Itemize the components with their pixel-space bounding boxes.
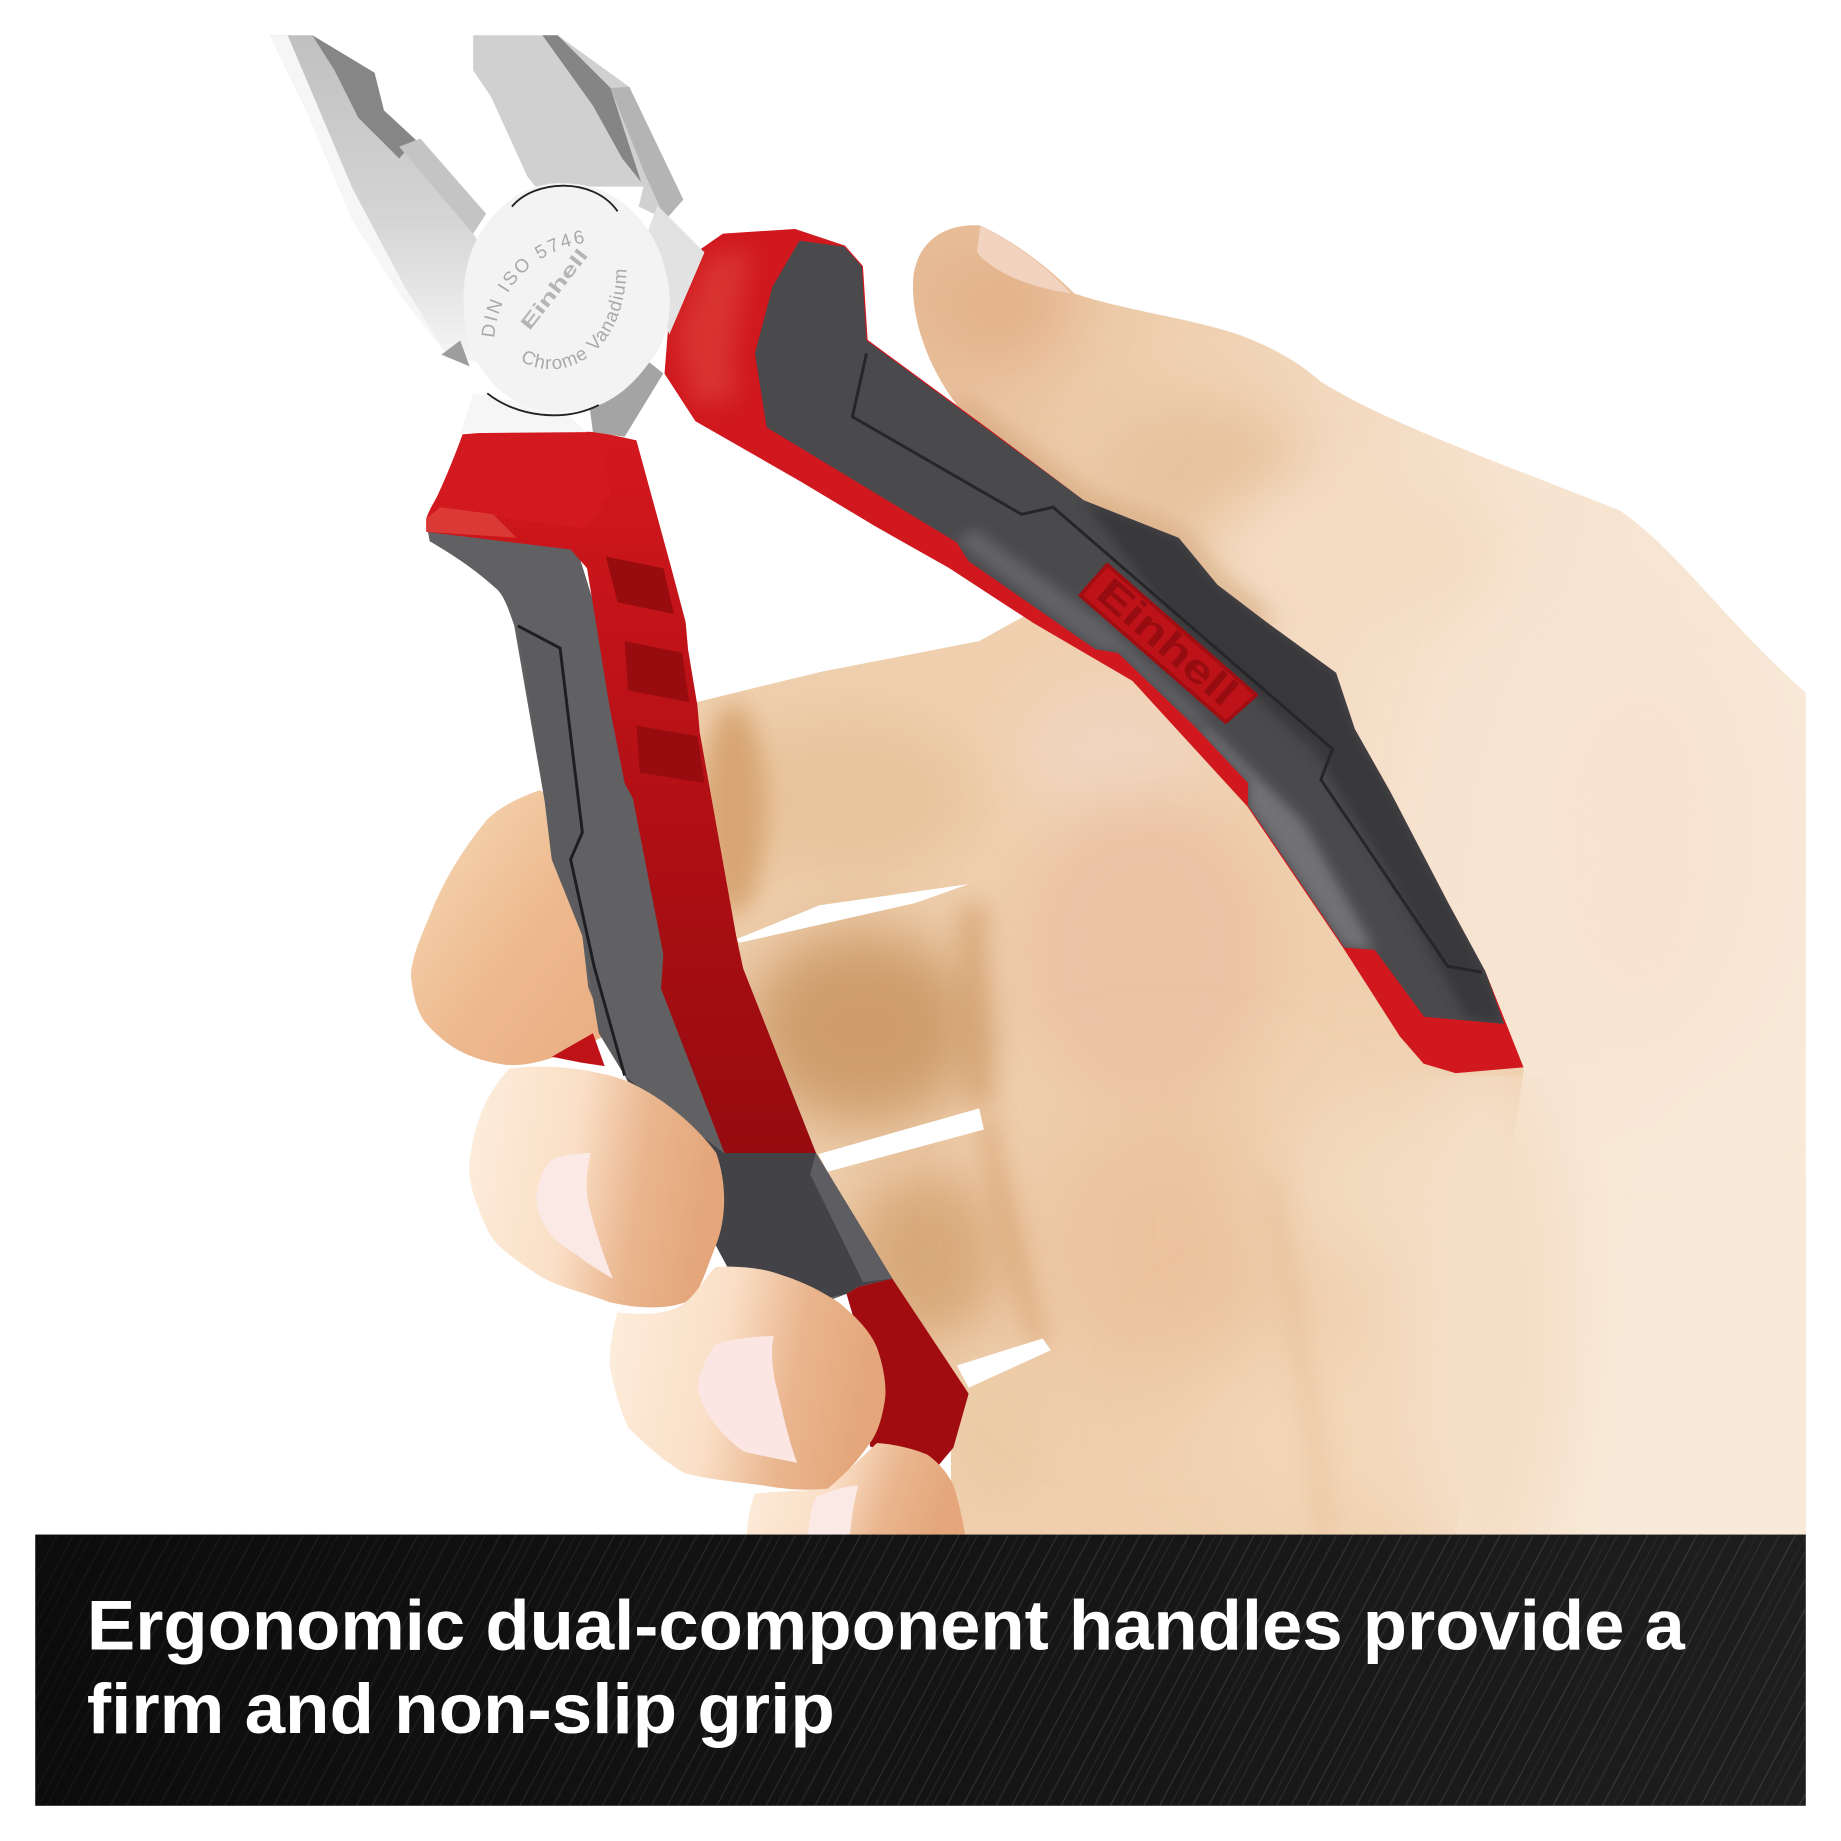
gap between index and middle finger <box>736 884 969 943</box>
plier head <box>270 35 704 437</box>
logo plate <box>1080 565 1256 722</box>
photo: hand gripping pliers <box>270 35 1806 1534</box>
groove in right handle <box>852 353 1482 972</box>
thumb and heel of the hand <box>913 225 1806 1597</box>
red lower cap <box>847 1279 969 1470</box>
gap between middle and ring finger <box>818 1108 984 1172</box>
fingernail <box>697 1336 797 1463</box>
lower metal necks <box>640 205 704 335</box>
palm blend below handle end <box>1402 1076 1566 1534</box>
logo plate: Einhell <box>1088 570 1246 715</box>
fourth fingertip with nail <box>747 1443 965 1535</box>
grip recess 3 <box>636 726 704 783</box>
third fingertip with nail <box>609 1267 886 1490</box>
gap between ring and little finger <box>957 1338 1051 1388</box>
caption line 2: firm and non-slip grip <box>87 1669 835 1748</box>
right plier handle <box>666 223 1538 1072</box>
caption banner <box>35 1535 1806 1806</box>
red sliver beside fingertip <box>552 1033 605 1066</box>
hand: palm and rear fingers <box>687 611 1806 1538</box>
red body of left handle <box>426 430 816 1153</box>
index fingertip behind left handle <box>411 790 611 1065</box>
groove in left handle <box>518 626 625 1075</box>
pivot disc with stamped markings <box>464 183 670 416</box>
fingernail <box>808 1485 858 1535</box>
grey grip of right handle <box>755 240 1504 1024</box>
fingernail <box>536 1153 613 1279</box>
caption line 1: Ergonomic dual-component handles provide a <box>87 1586 1686 1665</box>
upper right jaw <box>473 35 683 220</box>
red end cap highlight <box>675 247 751 405</box>
upper left jaw <box>270 35 505 364</box>
small pivot wedge <box>441 340 470 366</box>
stamped logo: Einhell <box>516 245 592 334</box>
grey body of left handle <box>426 522 892 1303</box>
thumbnail edge <box>977 225 1071 294</box>
second fingertip with nail <box>469 1066 724 1307</box>
grip recess 2 <box>625 641 689 702</box>
stamped text: DIN ISO 5746: DIN ISO 5746 <box>481 230 584 337</box>
stamped text: Chrome Vanadium: Chrome Vanadium <box>522 270 626 370</box>
left plier handle <box>426 430 969 1470</box>
grip recess 1 <box>606 557 674 614</box>
